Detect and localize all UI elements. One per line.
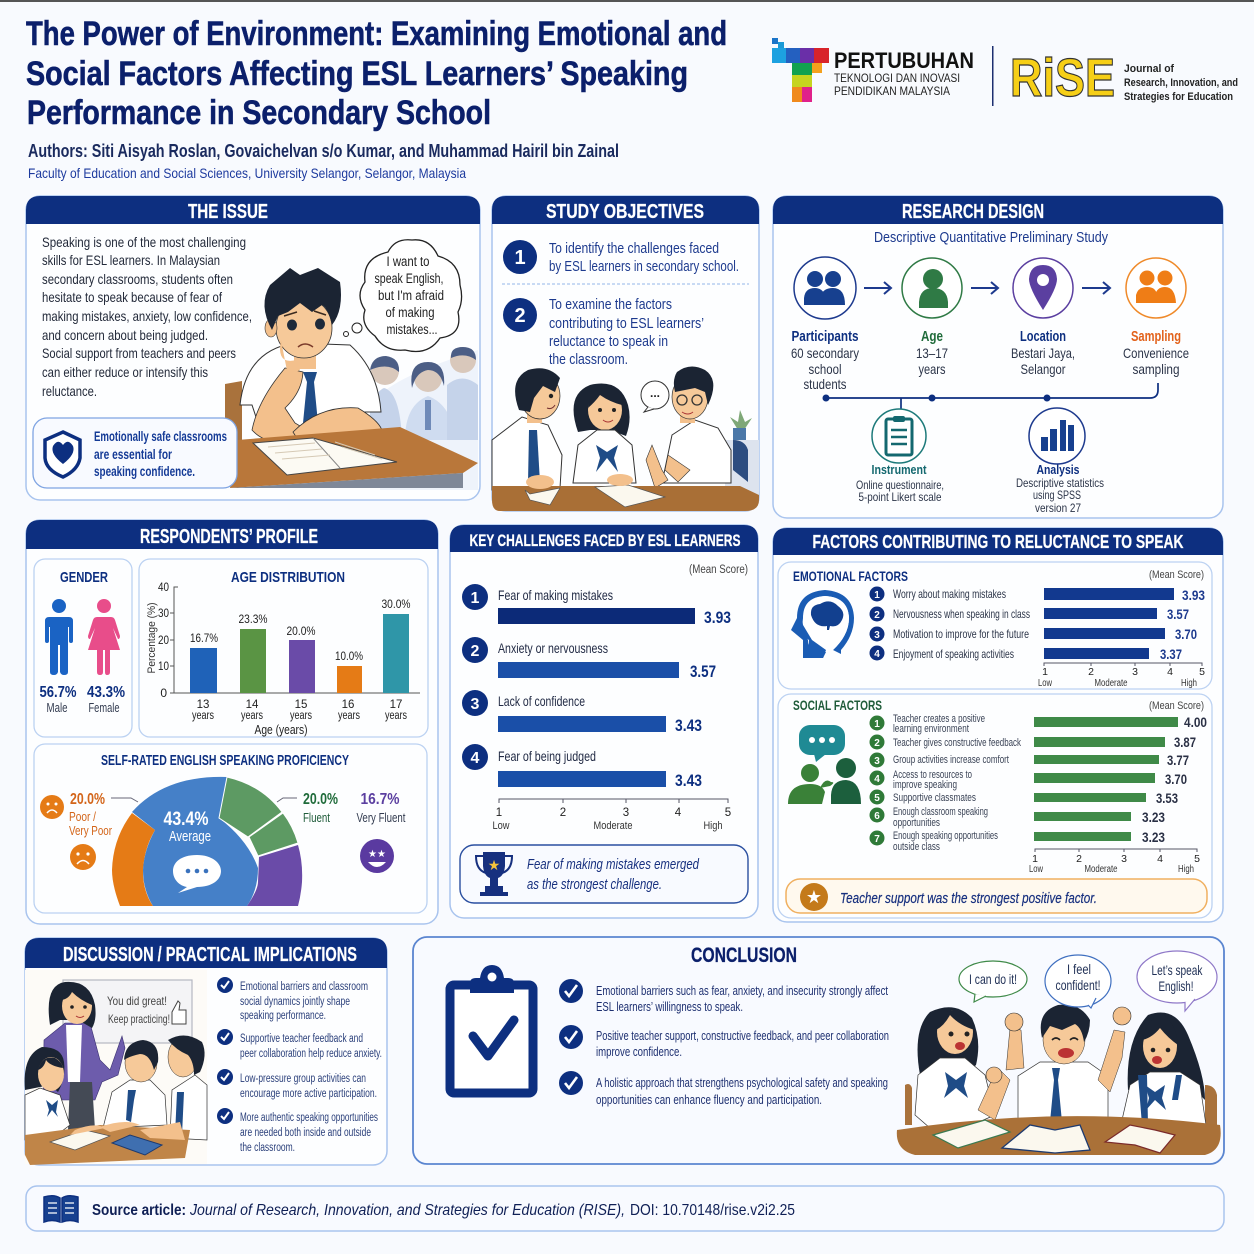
- challenge 1: 3.93: [704, 609, 731, 627]
- text block: issue description: skills for ESL learners. In Malaysian: [42, 252, 220, 268]
- emotional axis: Moderate: [1094, 678, 1128, 689]
- callout: teacher support: [786, 879, 1207, 913]
- sub-panel: age distribution chart: 10: [158, 659, 169, 673]
- source citation: Journal of Research, Innovation, and Strategies for Education (RISE),: [189, 1202, 625, 1219]
- thought bubble: speak English,: [374, 271, 444, 286]
- icon: social people: [788, 725, 861, 804]
- sub-panel: age distribution chart: 17: [390, 699, 402, 711]
- axis: Moderate: [594, 820, 632, 832]
- challenge 1: 1: [471, 590, 480, 607]
- sub-panel: age distribution chart: 10.0%: [335, 649, 363, 663]
- emotional rows: 3.57: [1167, 607, 1189, 622]
- donut chart: 43.4%: [164, 809, 209, 830]
- donut chart: [112, 777, 302, 906]
- title: The Power of Environment: Examining Emotional and: [26, 15, 727, 53]
- sub-panel: age distribution chart: 16: [342, 699, 354, 711]
- sub-panel: gender: GENDER: [60, 569, 108, 586]
- step: participants: school: [808, 361, 842, 377]
- logo: RISE: Journal of: [1124, 63, 1174, 75]
- thought bubble: I want to: [386, 254, 430, 269]
- social rows: outside class: [893, 841, 940, 853]
- sub-panel: age distribution chart: years: [338, 710, 360, 722]
- thought bubble: [344, 240, 462, 352]
- emotional axis: 2: [1088, 666, 1094, 678]
- sub-panel: age distribution chart: years: [385, 710, 407, 722]
- sub-panel: age distribution chart: 20: [158, 633, 169, 647]
- sub-panel: age distribution chart: 14: [246, 699, 259, 711]
- speech bubble: I feel confident: I feel: [1067, 961, 1091, 977]
- illustration: desk and open book: [230, 427, 478, 488]
- social axis: 3: [1121, 853, 1127, 865]
- text block: issue description: Social support from teachers and peers: [42, 345, 236, 361]
- step: participants: Participants: [792, 328, 858, 345]
- callout: emotionally safe: are essential for: [94, 447, 173, 462]
- sub-panel: social factors: [778, 694, 1212, 918]
- step: analysis: Analysis: [1036, 462, 1080, 477]
- conclusion point 1: [559, 979, 888, 1014]
- speech bubble: I can do it: [959, 961, 1027, 1002]
- step: location: Selangor: [1020, 361, 1066, 377]
- text block: issue description: hesitate to speak because of fear of: [42, 289, 222, 305]
- social rows: Access to resources to: [893, 769, 972, 781]
- step: participants: students: [804, 376, 846, 392]
- logo: RISE: [1010, 48, 1238, 108]
- social axis: 1: [1032, 853, 1038, 865]
- step: sampling: sampling: [1132, 361, 1180, 377]
- implication 1: speaking performance.: [240, 1010, 326, 1022]
- implication 4: [217, 1108, 378, 1154]
- step: location: [1011, 258, 1075, 377]
- emotional axis: 5: [1199, 666, 1205, 678]
- logo: Pertubuhan: PENDIDIKAN MALAYSIA: [834, 84, 950, 98]
- objective 2: reluctance to speak in: [549, 334, 668, 350]
- step: age: Age: [921, 328, 943, 345]
- authors: Authors: Siti Aisyah Roslan, Govaichelvan s/o Kumar, and Muhammad Hairil bin Zainal: [28, 141, 619, 161]
- callout: strongest challenge: as the strongest challenge.: [527, 876, 662, 893]
- callout: emotionally safe: [33, 418, 237, 488]
- emotional axis: High: [1181, 678, 1197, 689]
- donut chart: Average: [169, 829, 211, 845]
- sub-panel: gender: Female: [88, 701, 120, 715]
- title: Performance in Secondary School: [27, 94, 491, 132]
- objective 2: 2: [514, 305, 526, 327]
- heading: research design: RESEARCH DESIGN: [902, 200, 1044, 223]
- social rows: 4.00: [1184, 715, 1207, 730]
- illustration: teacher and students: Keep practicing!: [108, 1012, 170, 1026]
- panel: the issue: [26, 196, 480, 500]
- implication 2: peer collaboration help reduce anxiety.: [240, 1048, 382, 1060]
- callout: emotionally safe: speaking confidence.: [94, 464, 195, 479]
- emotional rows: 3.37: [1160, 647, 1182, 662]
- emotional rows: 3: [874, 630, 880, 641]
- emotional rows: 3.70: [1175, 627, 1197, 642]
- objective 2: contributing to ESL learners’: [549, 316, 704, 332]
- challenge 3: 3: [471, 696, 480, 713]
- icon: head with brain: [791, 590, 854, 658]
- illustration: sad student: [240, 268, 382, 443]
- social axis: Low: [1029, 864, 1044, 875]
- panel: key challenges: (Mean Score): [689, 564, 748, 576]
- speech bubble: let's speak English: [1137, 951, 1217, 1011]
- implication 1: social dynamics jointly shape: [240, 996, 350, 1008]
- sub-panel: age distribution chart: 15: [295, 699, 307, 711]
- implication 2: [217, 1029, 382, 1060]
- implication 1: Emotional barriers and classroom: [240, 981, 368, 993]
- connector line: [822, 383, 1158, 410]
- challenge 4: 3.43: [675, 772, 702, 790]
- social axis: High: [1178, 864, 1194, 875]
- source citation: Source article:: [92, 1202, 186, 1219]
- challenge 3: Lack of confidence: [498, 693, 585, 709]
- panel: discussion: [25, 938, 387, 1165]
- icon: book: [44, 1196, 78, 1222]
- challenge 4: 4: [471, 750, 480, 767]
- social rows: 7: [874, 834, 880, 845]
- social axis: 2: [1076, 853, 1082, 865]
- step: age: years: [918, 361, 946, 377]
- emotional rows: [870, 586, 1205, 662]
- social axis: [1029, 849, 1200, 875]
- panel: respondents' profile: [26, 520, 438, 924]
- objective 2: To examine the factors: [549, 297, 672, 313]
- sub-panel: gender: Male: [46, 701, 68, 715]
- arrow: [971, 282, 998, 294]
- social rows: 2: [874, 738, 880, 749]
- step: analysis: Descriptive statistics: [1016, 476, 1104, 490]
- social rows: 3.53: [1156, 791, 1178, 806]
- social rows: 3.23: [1142, 830, 1165, 845]
- arrow: [864, 282, 891, 294]
- title: Social Factors Affecting ESL Learners’ Speaking: [26, 55, 688, 93]
- objective 1: [503, 240, 739, 275]
- speech bubble: I can do it: I can do it!: [969, 971, 1017, 987]
- icon: female: [88, 599, 120, 675]
- challenge 2: 2: [471, 643, 480, 660]
- step: age: 13–17: [916, 345, 948, 361]
- social rows: 3.87: [1174, 735, 1196, 750]
- label: very fluent: ★★: [368, 849, 386, 860]
- implication 4: the classroom.: [240, 1142, 295, 1154]
- thought bubble: of making: [386, 305, 434, 320]
- text block: issue description: secondary classrooms, students often: [42, 271, 233, 287]
- text block: issue description: and concern about being judged.: [42, 327, 208, 343]
- label: fluent: [277, 791, 338, 825]
- logo: Pertubuhan: PERTUBUHAN: [834, 48, 974, 73]
- implication 3: [217, 1069, 377, 1100]
- emotional rows: 3.93: [1182, 588, 1205, 603]
- label: fluent: Fluent: [303, 810, 330, 825]
- axis: 1: [496, 807, 502, 819]
- panel: conclusion: [413, 937, 1224, 1164]
- step: sampling: Sampling: [1131, 328, 1181, 345]
- subtitle: Descriptive Quantitative Preliminary Study: [874, 229, 1108, 246]
- step: location: Bestari Jaya,: [1011, 345, 1075, 361]
- challenge 2: Anxiety or nervousness: [498, 640, 608, 656]
- implication 3: Low-pressure group activities can: [240, 1073, 366, 1085]
- speech bubble: let's speak English: Let’s speak: [1152, 962, 1203, 978]
- implication 3: encourage more active participation.: [240, 1088, 377, 1100]
- heading: conclusion: CONCLUSION: [691, 944, 797, 967]
- step: analysis: using SPSS: [1033, 488, 1081, 502]
- speech bubble: I feel confident: [1045, 955, 1111, 1008]
- conclusion point 2: Positive teacher support, constructive feedback, and peer collaboration: [596, 1028, 889, 1043]
- panel: source article: [26, 1186, 1224, 1231]
- emotional axis: [1038, 663, 1205, 689]
- label: poor: Poor /: [69, 809, 96, 824]
- conclusion point 3: opportunities can enhance fluency and participation.: [596, 1092, 822, 1107]
- callout: strongest challenge: [460, 845, 748, 903]
- social rows: Supportive classmates: [893, 792, 976, 804]
- sub-panel: age distribution chart: 23.3%: [238, 612, 268, 626]
- speech bubble: I feel confident: confident!: [1056, 977, 1100, 993]
- heading: key challenges: KEY CHALLENGES FACED BY ESL LEARNERS: [470, 531, 740, 550]
- implication 4: are needed both inside and outside: [240, 1127, 371, 1139]
- emotional rows: 1: [874, 590, 880, 601]
- sub-panel: age distribution chart: years: [241, 710, 263, 722]
- callout: strongest challenge: Fear of making mistakes emerged: [527, 856, 699, 873]
- step: age: [902, 258, 962, 377]
- emotional rows: 2: [874, 610, 880, 621]
- social rows: Teacher creates a positive: [893, 713, 985, 725]
- social rows: 4: [874, 774, 880, 785]
- challenge 2: [462, 637, 716, 681]
- illustration: students talking: ...: [650, 386, 660, 400]
- logo: Pertubuhan: [772, 38, 974, 102]
- social rows: 3.23: [1142, 810, 1165, 825]
- affiliation: Faculty of Education and Social Sciences, University Selangor, Selangor, Malaysia: [28, 165, 466, 181]
- text block: issue description: can either reduce or intensify this: [42, 364, 208, 380]
- sub-panel: social factors: SOCIAL FACTORS: [793, 697, 882, 713]
- label: poor: Very Poor: [69, 823, 112, 838]
- axis: 4: [675, 807, 682, 819]
- sub-panel: gender: [34, 559, 132, 737]
- implication 2: Supportive teacher feedback and: [240, 1033, 363, 1045]
- heading: discussion: DISCUSSION / PRACTICAL IMPLICATIONS: [63, 943, 357, 966]
- step: instrument: 5-point Likert scale: [858, 490, 942, 504]
- icon: male: [45, 599, 73, 675]
- emotional rows: Worry about making mistakes: [893, 587, 1006, 601]
- sub-panel: age distribution chart: years: [192, 710, 214, 722]
- social rows: Enough classroom speaking: [893, 806, 988, 818]
- step: sampling: Convenience: [1123, 345, 1189, 361]
- axis: 2: [560, 807, 566, 819]
- conclusion point 2: improve confidence.: [596, 1044, 682, 1059]
- objective 1: 1: [514, 247, 526, 269]
- text block: issue description: Speaking is one of the most challenging: [42, 234, 246, 250]
- callout: emotionally safe: Emotionally safe classrooms: [94, 429, 227, 444]
- step: analysis: version 27: [1035, 501, 1081, 515]
- illustration: background students: [368, 347, 478, 490]
- social rows: [870, 713, 1207, 853]
- social rows: opportunities: [893, 817, 940, 829]
- conclusion point 1: Emotional barriers such as fear, anxiety, and insecurity strongly affect: [596, 983, 888, 998]
- step: instrument: Online questionnaire,: [856, 478, 944, 492]
- sub-panel: age distribution chart: 13: [197, 699, 209, 711]
- label: very fluent: [356, 791, 406, 873]
- challenge 3: 3.43: [675, 717, 702, 735]
- text block: issue description: reluctance.: [42, 383, 97, 399]
- sub-panel: age distribution chart: Age (years): [254, 723, 308, 737]
- social axis: 4: [1157, 853, 1163, 865]
- logo: RISE: RiSE: [1010, 48, 1115, 108]
- challenge 4: Fear of being judged: [498, 748, 596, 764]
- sub-panel: age distribution chart: 20.0%: [286, 624, 316, 638]
- heading: the issue: THE ISSUE: [188, 200, 268, 223]
- illustration: students talking: [492, 366, 759, 511]
- step: instrument: Instrument: [872, 462, 927, 477]
- social rows: Teacher gives constructive feedback: [893, 737, 1021, 749]
- axis: High: [704, 820, 722, 832]
- sub-panel: age distribution chart: 40: [158, 580, 169, 594]
- sub-panel: age distribution chart: 30.0%: [382, 597, 411, 611]
- emotional rows: Motivation to improve for the future: [893, 627, 1029, 641]
- sub-panel: gender: 56.7%: [40, 684, 76, 701]
- emotional axis: 4: [1167, 666, 1173, 678]
- social rows: learning environment: [893, 723, 969, 735]
- implication 4: More authentic speaking opportunities: [240, 1112, 378, 1124]
- social axis: 5: [1194, 853, 1200, 865]
- sub-panel: social factors: (Mean Score): [1149, 700, 1204, 712]
- sub-panel: self-rated proficiency: SELF-RATED ENGLISH SPEAKING PROFICIENCY: [101, 752, 349, 769]
- objective 2: [503, 297, 704, 368]
- challenge 1: Fear of making mistakes: [498, 587, 613, 603]
- social rows: 3.70: [1165, 772, 1187, 787]
- emotional axis: 1: [1042, 666, 1048, 678]
- objective 1: by ESL learners in secondary school.: [549, 259, 739, 275]
- panel: key challenges: [450, 525, 758, 918]
- social rows: 1: [874, 719, 880, 730]
- speech bubble: let's speak English: English!: [1158, 978, 1194, 994]
- social rows: 3.77: [1167, 753, 1189, 768]
- thought bubble: mistakes...: [386, 322, 438, 337]
- challenge 4: [462, 744, 702, 790]
- callout: teacher support: Teacher support was the strongest positive factor.: [840, 890, 1097, 907]
- label: very fluent: 16.7%: [360, 791, 400, 808]
- step: location: Location: [1020, 328, 1066, 345]
- objective 1: To identify the challenges faced: [549, 241, 719, 257]
- challenge 2: 3.57: [690, 663, 716, 681]
- implication 1: [217, 977, 368, 1022]
- conclusion point 2: [559, 1025, 889, 1059]
- callout: teacher support: ★: [806, 887, 822, 907]
- social rows: Group activities increase comfort: [893, 754, 1009, 766]
- panel: factors: [773, 528, 1223, 922]
- sub-panel: emotional factors: [778, 562, 1212, 689]
- sub-panel: age distribution chart: Percentage (%): [146, 602, 158, 674]
- sub-panel: age distribution chart: [139, 559, 428, 737]
- conclusion point 3: A holistic approach that strengthens psychological safety and speaking: [596, 1075, 888, 1090]
- emotional axis: Low: [1038, 678, 1053, 689]
- step: analysis: [1016, 408, 1104, 515]
- sub-panel: age distribution chart: AGE DISTRIBUTION: [231, 569, 345, 586]
- emotional rows: Nervousness when speaking in class: [893, 607, 1030, 621]
- social rows: 3: [874, 756, 880, 767]
- sub-panel: age distribution chart: years: [290, 710, 312, 722]
- logo: RISE: Strategies for Education: [1124, 91, 1233, 103]
- axis: 5: [725, 807, 731, 819]
- objective 2: the classroom.: [549, 352, 628, 368]
- sub-panel: emotional factors: EMOTIONAL FACTORS: [793, 568, 908, 584]
- heading: respondents' profile: RESPONDENTS’ PROFILE: [140, 525, 318, 548]
- social rows: 6: [874, 811, 880, 822]
- sub-panel: self-rated proficiency: [34, 744, 427, 913]
- label: poor: [40, 791, 138, 870]
- axis: [492, 799, 731, 832]
- step: participants: 60 secondary: [791, 345, 859, 361]
- axis: Low: [492, 820, 510, 832]
- step: instrument: [856, 409, 944, 504]
- source citation: DOI: 10.70148/rise.v2i2.25: [630, 1202, 795, 1219]
- text block: issue description: [42, 234, 252, 399]
- panel: study objectives: [492, 196, 759, 511]
- arrow: [1082, 282, 1110, 294]
- heading: study objectives: STUDY OBJECTIVES: [546, 200, 704, 223]
- text block: issue description: making mistakes, anxiety, low confidence,: [42, 308, 252, 324]
- sub-panel: age distribution chart: 0: [160, 686, 167, 700]
- emotional rows: Enjoyment of speaking activities: [893, 647, 1014, 661]
- illustration: chair: [225, 381, 242, 440]
- social rows: 5: [874, 793, 880, 804]
- illustration: happy students: [897, 1005, 1221, 1155]
- conclusion point 3: [559, 1071, 888, 1107]
- step: participants: [791, 257, 859, 392]
- icon: clipboard: [450, 965, 533, 1093]
- illustration: teacher and students: You did great!: [107, 994, 167, 1008]
- sub-panel: age distribution chart: 16.7%: [190, 631, 218, 645]
- sub-panel: gender: 43.3%: [87, 684, 125, 701]
- logo: Pertubuhan: TEKNOLOGI DAN INOVASI: [834, 71, 960, 85]
- illustration: teacher and students: [25, 970, 207, 1165]
- axis: 3: [623, 807, 629, 819]
- step: sampling: [1123, 258, 1189, 377]
- panel: research design: [773, 196, 1223, 518]
- challenge 1: [462, 584, 731, 627]
- label: very fluent: Very Fluent: [356, 810, 406, 825]
- social axis: Moderate: [1084, 864, 1118, 875]
- social rows: improve speaking: [893, 779, 957, 791]
- conclusion point 1: ESL learners’ willingness to speak.: [596, 999, 743, 1014]
- callout: strongest challenge: ★: [488, 857, 500, 873]
- label: fluent: 20.0%: [303, 791, 338, 808]
- label: poor: 20.0%: [70, 791, 105, 808]
- social rows: Enough speaking opportunities: [893, 830, 998, 842]
- title: [26, 15, 727, 132]
- emotional axis: 3: [1132, 666, 1138, 678]
- thought bubble: but I'm afraid: [378, 288, 444, 303]
- sub-panel: age distribution chart: 30: [158, 606, 169, 620]
- challenge 3: [462, 690, 702, 735]
- emotional rows: 4: [874, 649, 880, 660]
- sub-panel: emotional factors: (Mean Score): [1149, 569, 1204, 581]
